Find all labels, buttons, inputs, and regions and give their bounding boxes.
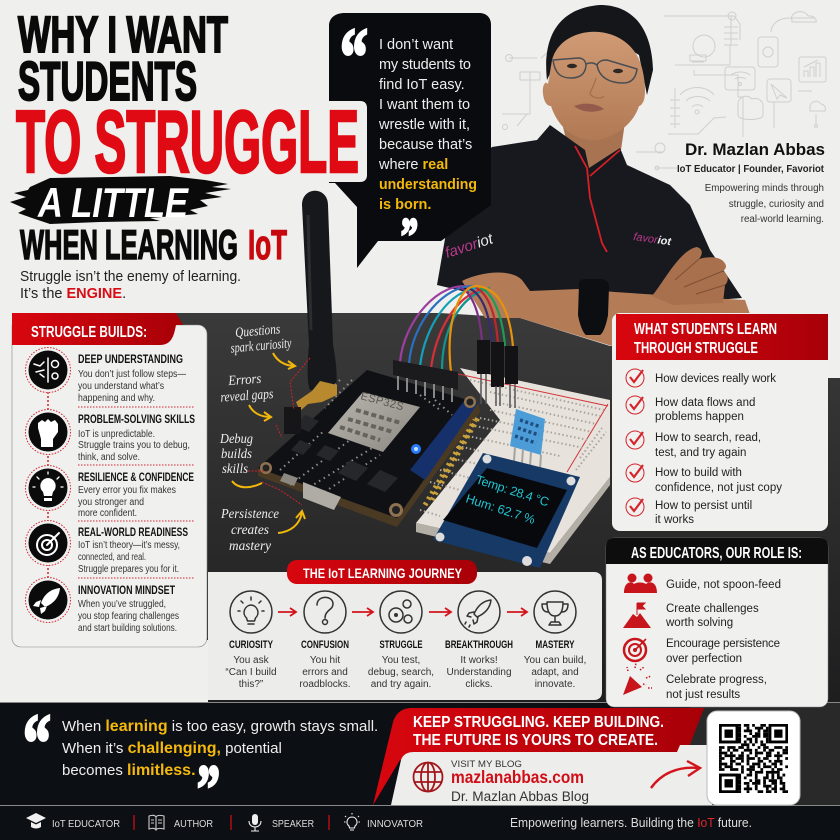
step: struggle: and try again. bbox=[371, 679, 431, 690]
item: guide: Guide, not spoon-feed bbox=[666, 579, 781, 591]
item: persist: How to persist until bbox=[655, 500, 752, 512]
name block: IoT Educator | Founder, Favoriot bbox=[677, 163, 824, 175]
sleeve logo: favoriot bbox=[443, 230, 496, 262]
OLED display: Temp: 28.4 °C bbox=[474, 473, 551, 509]
item: data flows bbox=[626, 396, 755, 423]
item: challenges: worth solving bbox=[665, 617, 733, 629]
item: real-world readiness: connected, and real. bbox=[78, 552, 146, 563]
item: devices: How devices really work bbox=[655, 373, 776, 385]
red banner bbox=[373, 708, 704, 805]
DHT sensor bbox=[510, 409, 545, 483]
item: persist: it works bbox=[655, 514, 694, 526]
note: persistence creates mastery: creates bbox=[231, 523, 270, 538]
panel heading bbox=[606, 538, 828, 564]
call to action: THE FUTURE IS YOURS TO CREATE. bbox=[413, 732, 658, 749]
quote bubble bbox=[300, 13, 491, 268]
item: celebrate: Celebrate progress, bbox=[666, 674, 767, 686]
OLED display: Hum: 62.7 % bbox=[464, 492, 537, 527]
ESP module bbox=[328, 392, 420, 452]
small switch bbox=[284, 407, 301, 434]
step: curiosity: “Can I build bbox=[225, 667, 277, 678]
item: real-world readiness: IoT isn’t theory—it’s messy, bbox=[78, 540, 180, 551]
bottom quote text bbox=[62, 718, 378, 779]
bottom quote band bbox=[0, 699, 840, 826]
globe icon bbox=[414, 762, 442, 792]
step: struggle: You test, bbox=[382, 655, 420, 666]
closing quote mark: ” bbox=[401, 209, 418, 264]
arrow: debug bbox=[232, 481, 262, 487]
bottom quote text: When it’s challenging, potential bbox=[62, 740, 282, 757]
subtitle: It’s the ENGINE. bbox=[20, 286, 126, 302]
antenna bbox=[302, 191, 337, 390]
item: celebrate: not just results bbox=[666, 689, 740, 701]
note: errors reveal gaps: reveal gaps bbox=[220, 387, 274, 406]
panel heading bbox=[616, 314, 828, 360]
item: search: test, and try again bbox=[655, 447, 746, 459]
item: problem-solving skills: Struggle trains you to debug, bbox=[78, 440, 190, 451]
item: confidence: confidence, not just copy bbox=[655, 482, 782, 494]
quote text: where real bbox=[378, 157, 448, 173]
note: debug builds skills: builds bbox=[221, 447, 252, 462]
step: mastery bbox=[524, 591, 586, 690]
item: resilience and confidence bbox=[26, 466, 194, 519]
footer item: IoT educator bbox=[26, 813, 120, 830]
item: resilience and confidence: more confident. bbox=[78, 508, 137, 519]
panel: learning journey bbox=[208, 560, 602, 700]
item: innovation mindset: When you’ve struggled, bbox=[78, 599, 166, 610]
quote text: because that’s bbox=[379, 137, 472, 153]
breadboard jumper plugs bbox=[477, 340, 518, 408]
closing quote mark: ” bbox=[197, 753, 220, 826]
arrow: questions bbox=[273, 353, 295, 369]
title line: to struggle: TO STRUGGLE bbox=[16, 92, 359, 191]
title bbox=[10, 6, 359, 268]
SMA connector bbox=[296, 381, 337, 411]
step: breakthrough: BREAKTHROUGH bbox=[445, 639, 513, 651]
subtitle: Struggle isn’t the enemy of learning. bbox=[20, 269, 241, 285]
IoT hardware bbox=[248, 191, 610, 568]
item: devices bbox=[626, 369, 776, 387]
item: search: How to search, read, bbox=[655, 432, 761, 444]
note: persistence creates mastery bbox=[220, 507, 279, 554]
item: real-world readiness bbox=[26, 520, 188, 575]
jumper wires bbox=[400, 286, 513, 372]
item: deep understanding: You don’t just follow steps— bbox=[78, 369, 186, 380]
footer item: speaker bbox=[249, 814, 314, 831]
note: debug builds skills bbox=[219, 432, 253, 477]
shirt zip bbox=[575, 146, 620, 252]
face bbox=[543, 32, 645, 140]
arrow: struggle to breakthrough bbox=[429, 608, 451, 616]
connector bbox=[47, 392, 49, 578]
eyes and mouth bbox=[567, 64, 623, 112]
decorative IoT line art bbox=[502, 12, 826, 170]
item: deep understanding: happening and why. bbox=[78, 393, 155, 404]
footer item: IoT educator: IoT EDUCATOR bbox=[52, 818, 120, 830]
item: innovation mindset: and start building solutions. bbox=[78, 623, 177, 634]
quote text: my students to bbox=[379, 57, 471, 73]
panel: educators role bbox=[606, 538, 828, 707]
name block bbox=[677, 140, 825, 225]
panel heading bbox=[12, 313, 183, 345]
item: resilience and confidence: Every error you fix makes bbox=[78, 485, 176, 496]
CTA headline: KEEP STRUGGLING. KEEP BUILDING. bbox=[413, 714, 664, 731]
note: debug builds skills: Debug bbox=[219, 432, 253, 447]
QR code bbox=[719, 725, 788, 792]
subtitle bbox=[20, 269, 241, 302]
pin header bbox=[393, 360, 458, 402]
step: mastery: innovate. bbox=[535, 679, 575, 690]
item: deep understanding bbox=[26, 348, 186, 404]
step: confusion: You hit bbox=[310, 655, 340, 666]
step: struggle: debug, search, bbox=[368, 667, 434, 678]
step: confusion bbox=[299, 591, 351, 690]
note: errors reveal gaps bbox=[219, 371, 274, 406]
item: deep understanding: DEEP UNDERSTANDING bbox=[78, 352, 183, 366]
step: breakthrough bbox=[445, 591, 513, 690]
item: persistence: over perfection bbox=[666, 653, 742, 665]
quote text: find IoT easy. bbox=[379, 77, 465, 93]
title line: when learning IoT: WHEN LEARNING bbox=[20, 221, 238, 268]
step: struggle: STRUGGLE bbox=[380, 639, 422, 651]
panel heading: STRUGGLE BUILDS: bbox=[31, 324, 147, 341]
note: errors reveal gaps: Errors bbox=[227, 372, 262, 389]
item: challenges bbox=[623, 603, 759, 629]
item: persistence bbox=[624, 638, 780, 665]
microcontroller board: ESP32S bbox=[359, 390, 405, 413]
name block: Empowering minds through bbox=[705, 183, 824, 194]
note: questions spark curiosity: Questions bbox=[235, 322, 281, 341]
step: confusion: CONFUSION bbox=[301, 639, 349, 651]
step: breakthrough: clicks. bbox=[465, 679, 493, 690]
item: confidence bbox=[626, 464, 782, 494]
quote text: is born. bbox=[379, 197, 431, 213]
panel heading: WHAT STUDENTS LEARN bbox=[634, 321, 777, 338]
item: celebrate bbox=[623, 663, 767, 701]
title line: students: STUDENTS bbox=[18, 50, 197, 112]
item: problem-solving skills: think, and solve. bbox=[78, 452, 140, 463]
item: innovation mindset: INNOVATION MINDSET bbox=[78, 583, 175, 597]
chest logo: favoriot bbox=[633, 231, 673, 248]
note: questions spark curiosity bbox=[229, 321, 293, 357]
USB connector bbox=[303, 482, 341, 510]
footer item: author: AUTHOR bbox=[174, 818, 213, 830]
step: curiosity: You ask bbox=[233, 655, 270, 666]
chalk notes bbox=[219, 321, 305, 554]
item: deep understanding: you understand what’s bbox=[78, 381, 164, 392]
arrow: breakthrough to mastery bbox=[507, 608, 527, 616]
neck bbox=[560, 115, 626, 175]
quote text: I don’t want bbox=[379, 37, 453, 53]
step: curiosity: CURIOSITY bbox=[229, 639, 273, 651]
hair bbox=[546, 5, 653, 95]
bottom quote text: When learning is too easy, growth stays small. bbox=[62, 718, 378, 735]
annotation trace bbox=[248, 358, 310, 505]
name block: struggle, curiosity and bbox=[729, 199, 824, 210]
item: innovation mindset bbox=[26, 578, 179, 634]
footer bar bbox=[0, 806, 840, 840]
panel heading: THROUGH STRUGGLE bbox=[634, 340, 758, 357]
footer item: innovator: INNOVATOR bbox=[367, 818, 423, 830]
quote text bbox=[378, 37, 477, 213]
arrow: curiosity to confusion bbox=[278, 608, 296, 616]
footer item: innovator bbox=[344, 813, 423, 830]
step: mastery: You can build, bbox=[524, 655, 586, 666]
item: data flows: How data flows and bbox=[655, 397, 755, 409]
blog card bbox=[391, 745, 712, 805]
journey heading pill bbox=[287, 560, 477, 584]
step: breakthrough: Understanding bbox=[446, 667, 512, 678]
breadboard bbox=[416, 368, 610, 564]
bottom quote text: becomes limitless. bbox=[62, 762, 196, 779]
quote text: understanding bbox=[379, 177, 477, 193]
step: breakthrough: It works! bbox=[460, 655, 498, 666]
item: real-world readiness: REAL-WORLD READINESS bbox=[78, 525, 188, 539]
item: confidence: How to build with bbox=[655, 467, 742, 479]
item: innovation mindset: you stop fearing challenges bbox=[78, 611, 179, 622]
footer tagline: Empowering learners. Building the IoT future. bbox=[510, 815, 752, 830]
item: persist bbox=[626, 498, 752, 526]
call to action bbox=[373, 708, 800, 805]
footer item: author bbox=[149, 815, 213, 830]
journey heading pill: THE IoT LEARNING JOURNEY bbox=[303, 565, 463, 581]
cutout behind title bbox=[300, 101, 367, 182]
opening quote mark: “ bbox=[340, 13, 368, 103]
title line: why I want: WHY I WANT bbox=[18, 6, 228, 63]
item: problem-solving skills: IoT is unpredictable. bbox=[78, 429, 155, 440]
item: guide bbox=[624, 574, 781, 593]
note: debug builds skills: skills bbox=[222, 462, 248, 477]
name block: Dr. Mazlan Abbas bbox=[685, 140, 825, 159]
footer item: speaker: SPEAKER bbox=[272, 818, 314, 830]
educator portrait bbox=[437, 5, 752, 346]
step: confusion: errors and bbox=[302, 667, 348, 678]
arrow to QR bbox=[651, 761, 700, 788]
step: confusion: roadblocks. bbox=[299, 679, 351, 690]
quote text: wrestle with it, bbox=[378, 117, 470, 133]
panel: what students learn bbox=[612, 313, 828, 531]
item: search bbox=[626, 431, 761, 459]
QR card bbox=[707, 711, 800, 805]
note: persistence creates mastery: Persistence bbox=[220, 507, 279, 522]
step: curiosity bbox=[225, 591, 277, 690]
blog text: VISIT MY BLOG bbox=[451, 759, 522, 770]
call to action: mazlanabbas.com bbox=[451, 767, 584, 787]
item: resilience and confidence: RESILIENCE & CONFIDENCE bbox=[78, 470, 194, 484]
name block: real-world learning. bbox=[741, 214, 824, 225]
item: real-world readiness: Struggle prepares you for it. bbox=[78, 564, 179, 575]
step: curiosity: this?” bbox=[239, 679, 263, 690]
item: challenges: Create challenges bbox=[666, 603, 759, 615]
glasses bbox=[553, 58, 637, 83]
step: mastery: MASTERY bbox=[536, 639, 575, 651]
item: persistence: Encourage persistence bbox=[666, 638, 780, 650]
note: persistence creates mastery: mastery bbox=[229, 539, 272, 554]
shirt bbox=[437, 125, 742, 305]
step: mastery: adapt, and bbox=[531, 667, 579, 678]
microcontroller board bbox=[258, 360, 480, 527]
title accent: IoT: IoT bbox=[248, 221, 287, 268]
hand bbox=[652, 247, 728, 305]
item: data flows: problems happen bbox=[655, 411, 744, 423]
watch bbox=[578, 279, 609, 335]
arrow: confusion to struggle bbox=[352, 608, 373, 616]
arrow: persistence bbox=[278, 511, 305, 533]
brush stroke banner: a little: A LITTLE bbox=[37, 179, 190, 226]
call to action: Dr. Mazlan Abbas Blog bbox=[451, 789, 589, 804]
panel: struggle builds bbox=[12, 313, 207, 647]
step: struggle bbox=[368, 591, 434, 690]
item: resilience and confidence: you stronger and bbox=[78, 497, 144, 508]
status LED bbox=[411, 444, 421, 454]
OLED display bbox=[433, 453, 580, 568]
opening quote mark: “ bbox=[23, 699, 51, 789]
item: problem-solving skills: PROBLEM-SOLVING SKILLS bbox=[78, 412, 195, 426]
forearm bbox=[462, 273, 752, 346]
dark table surface bbox=[100, 313, 840, 703]
quote text: I want them to bbox=[379, 97, 470, 113]
item: problem-solving skills bbox=[26, 410, 195, 463]
note: questions spark curiosity: spark curiosity bbox=[230, 336, 293, 357]
arrow: errors bbox=[249, 405, 271, 421]
